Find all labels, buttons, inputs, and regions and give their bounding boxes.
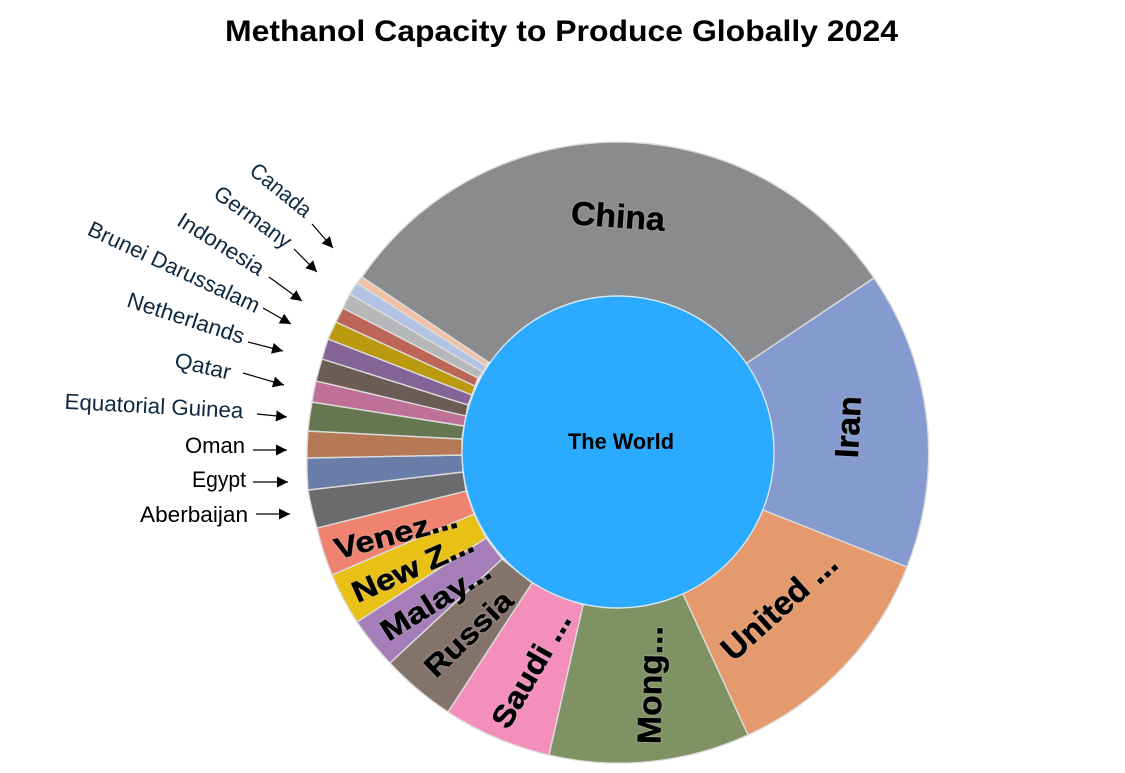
segment label: United: United ... bbox=[713, 544, 845, 668]
segment: small blue bbox=[350, 283, 486, 372]
segment label: Mongolia: Mong... bbox=[630, 626, 670, 744]
arrow: Netherlands bbox=[248, 342, 283, 351]
segment: China bbox=[362, 142, 874, 363]
arrow: Aberbaijan bbox=[256, 513, 290, 515]
callout label: Indonesia: Indonesia bbox=[173, 207, 270, 281]
callout label: Netherlands: Netherlands bbox=[124, 287, 248, 349]
segment: Russia bbox=[390, 559, 532, 712]
arrow: Oman bbox=[253, 449, 287, 451]
segment: Indonesia bbox=[328, 322, 475, 395]
arrow: Equatorial Guinea bbox=[257, 414, 287, 417]
segment: Qatar bbox=[312, 381, 466, 426]
segment: Equatorial Guinea bbox=[308, 402, 464, 439]
segment: Iran bbox=[747, 278, 929, 567]
callout label: Qatar: Qatar bbox=[172, 347, 234, 385]
segment label: China: China bbox=[570, 194, 667, 238]
segment label: Malaysia: Malay... bbox=[375, 554, 497, 648]
segment: Germany bbox=[336, 308, 478, 386]
segment: New Zealand bbox=[332, 514, 486, 622]
arrow: Germany bbox=[294, 249, 317, 272]
segment label: Saudi: Saudi ... bbox=[484, 606, 578, 734]
sunburst chart bbox=[307, 142, 929, 763]
arrow: Canada bbox=[312, 224, 333, 248]
callout label: Brunei Darussalam: Brunei Darussalam bbox=[84, 216, 264, 318]
segment label: Iran: Iran bbox=[828, 395, 868, 459]
arrow: Indonesia bbox=[269, 277, 302, 301]
segment label: New Zealand: New Z... bbox=[347, 526, 479, 610]
segment: Oman bbox=[307, 431, 462, 458]
arrow: Brunei Darussalam bbox=[263, 308, 291, 324]
segment: small grey bbox=[343, 294, 483, 378]
segment: Brunei Darussalam bbox=[322, 339, 472, 405]
segment label: Russia: Russia bbox=[418, 584, 520, 684]
callout label: Oman: Oman bbox=[185, 433, 245, 458]
segment: Malaysia bbox=[357, 538, 502, 663]
callout label: Egypt: Egypt bbox=[192, 467, 246, 492]
segment: Egypt bbox=[307, 455, 463, 490]
arrow: Egypt bbox=[253, 481, 288, 483]
centre circle bbox=[462, 296, 774, 608]
segment: Canada bbox=[357, 277, 488, 366]
title: Methanol Capacity to Produce Globally 2024 bbox=[225, 15, 898, 48]
segment: Mongolia bbox=[549, 594, 748, 763]
arrow: Qatar bbox=[243, 373, 284, 385]
segment: United ... bbox=[683, 510, 907, 735]
segment label: Venezuela: Venez... bbox=[331, 502, 461, 566]
callout label: Germany: Germany bbox=[209, 180, 297, 254]
segment: Netherlands bbox=[316, 359, 468, 416]
segment: Venezuela bbox=[317, 491, 474, 575]
centre label: The World bbox=[568, 429, 674, 454]
callout label: Aberbaijan: Aberbaijan bbox=[140, 502, 248, 527]
callout label: Equatorial Guinea: Equatorial Guinea bbox=[64, 389, 245, 423]
segment: Aberbaijan bbox=[308, 472, 466, 528]
segment: Saudi bbox=[448, 583, 583, 755]
callout label: Canada: Canada bbox=[245, 158, 317, 223]
